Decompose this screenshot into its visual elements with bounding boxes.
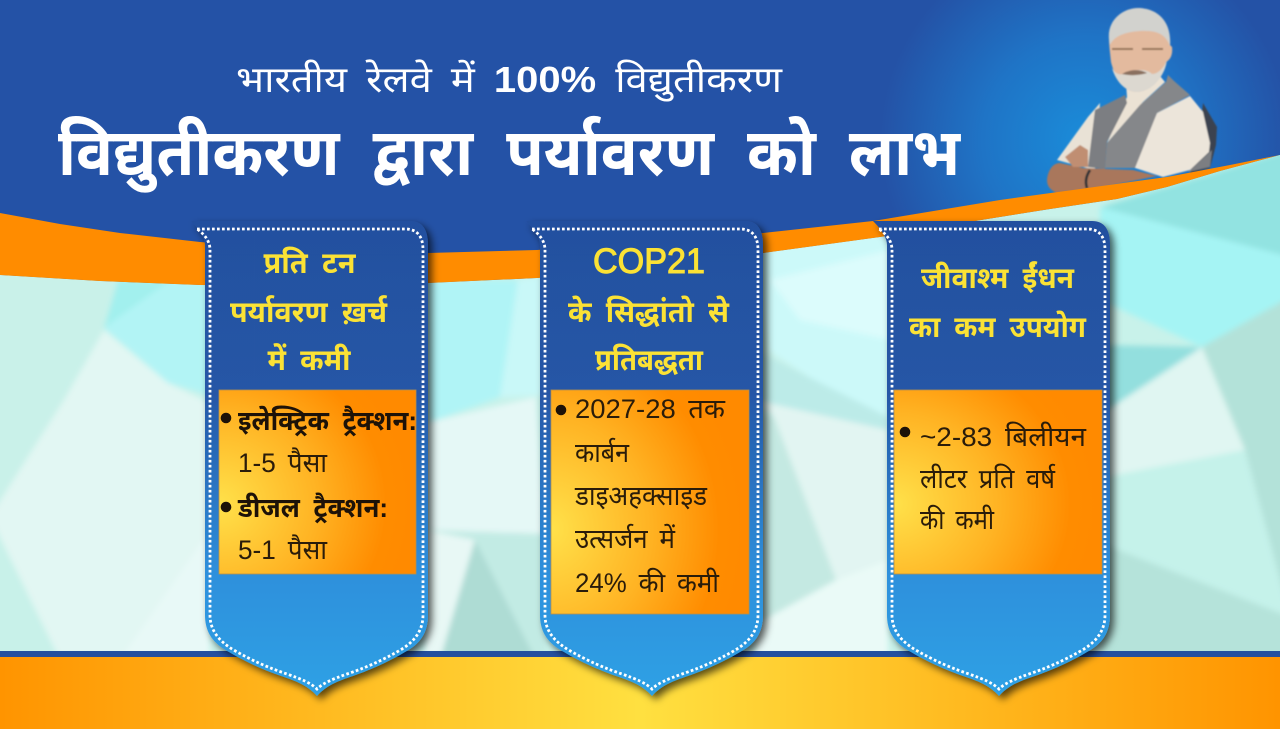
panel 2 bullet: 2027-28 तक	[575, 394, 726, 424]
panel 2 bullet: कार्बन	[575, 437, 630, 468]
footer band	[0, 651, 1280, 729]
panel 2 ribbon	[526, 221, 763, 696]
presenter portrait	[1047, 8, 1217, 193]
panel 1 bullets	[221, 405, 417, 565]
portrait: glasses	[1112, 48, 1163, 50]
portrait: neck and shirt	[1107, 70, 1165, 143]
panel 3 bullet: लीटर प्रति वर्ष	[920, 463, 1056, 494]
panel 1 bullets: इलेक्ट्रिक ट्रैक्शन:	[238, 405, 417, 437]
panel 3 content box	[894, 390, 1102, 574]
portrait: upper hand	[1065, 145, 1088, 167]
portrait: hair	[1109, 8, 1170, 46]
panel 1 content box	[219, 390, 416, 574]
panel 3 bullet	[900, 422, 1087, 535]
panel 1 heading	[230, 246, 388, 377]
panel 1 heading: पर्यावरण ख़र्च	[230, 295, 388, 329]
panel 2 bullet: 24% की कमी	[575, 567, 720, 598]
panel 3 stitching	[879, 229, 1105, 689]
panel 1 heading: में कमी	[268, 343, 352, 377]
panel 3 ribbon	[873, 221, 1110, 696]
portrait: beard	[1112, 60, 1167, 92]
portrait: shoulders back	[1190, 103, 1217, 174]
portrait: left sleeve	[1057, 103, 1100, 170]
panel 1 ribbon	[191, 221, 428, 696]
header: blue background	[0, 0, 1280, 300]
panel 2 bullet: उत्सर्जन में	[575, 523, 676, 554]
portrait: vest left	[1088, 95, 1127, 169]
left side facets	[0, 150, 1280, 665]
panel 1 heading: प्रति टन	[264, 246, 356, 280]
portrait: lower forearm	[1047, 163, 1157, 193]
panel 2 heading: के सिद्धांतो से	[568, 294, 730, 329]
panel 3 heading	[909, 261, 1086, 344]
middle-right facets	[755, 225, 890, 430]
panel 3 heading: जीवाश्म ईंधन	[921, 261, 1075, 295]
panel 2 heading: COP21	[593, 242, 705, 281]
panel 3 bullet: की कमी	[920, 504, 995, 535]
portrait: head	[1109, 12, 1172, 92]
portrait: moustache	[1122, 70, 1147, 75]
right side facets	[1100, 150, 1280, 257]
middle-left facets	[425, 280, 518, 423]
panel 2 content box	[551, 390, 749, 614]
panel: per-ton environment cost	[191, 221, 428, 696]
panel 2 stitching	[532, 229, 758, 689]
portrait: vest right	[1105, 75, 1190, 168]
panel 2 bullet: डाइअहक्साइड	[574, 481, 708, 511]
panel 2 bullet	[556, 394, 726, 598]
panel 1 bullets: डीजल ट्रैक्शन:	[237, 492, 388, 524]
panel 3 heading: का कम उपयोग	[909, 310, 1086, 344]
title line 1: भारतीय रेलवे में 100% विद्युतीकरण	[236, 59, 783, 102]
portrait: wrist band	[1086, 170, 1090, 188]
orange swoosh band	[0, 155, 1280, 286]
background: light facets	[0, 150, 1280, 665]
panel 2 heading	[568, 242, 730, 377]
panel: COP21 commitment	[526, 221, 763, 696]
title line 2: विद्युतीकरण द्वारा पर्यावरण को लाभ	[58, 115, 961, 193]
panel: reduced fossil fuel use	[873, 221, 1110, 696]
portrait: right sleeve	[1132, 96, 1210, 177]
panel 1 stitching	[197, 229, 423, 689]
panel 1 bullets: 5-1 पैसा	[238, 534, 328, 565]
portrait: vest lower right	[1188, 150, 1212, 172]
panel 3 bullet: ~2-83 बिलीयन	[920, 422, 1087, 452]
panel 1 bullets: 1-5 पैसा	[238, 447, 328, 478]
panel 2 heading: प्रतिबद्धता	[595, 343, 704, 377]
